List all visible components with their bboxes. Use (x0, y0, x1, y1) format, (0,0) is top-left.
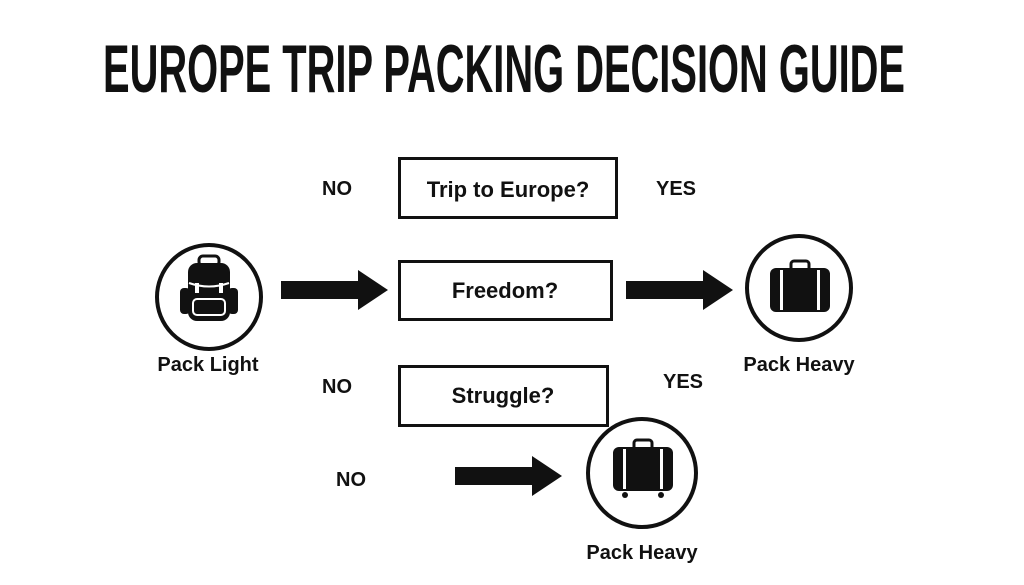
label: NO top: NO (322, 178, 352, 200)
label: NO middle: NO (322, 376, 352, 398)
arrow: bottom (455, 456, 562, 496)
arrow: left to Freedom (281, 270, 388, 310)
label: YES middle: YES (663, 371, 703, 393)
label: Pack Heavy right: Pack Heavy (743, 354, 855, 376)
box: Freedom?: Freedom? (452, 278, 558, 303)
label: NO bottom: NO (336, 469, 366, 491)
label: YES top: YES (656, 178, 696, 200)
box: Struggle?: Struggle? (452, 383, 554, 408)
arrow: Freedom to right (626, 270, 733, 310)
label: Pack Light: Pack Light (157, 354, 259, 376)
icon: suitcase circle right (747, 236, 851, 340)
icon: suitcase circle bottom (588, 419, 696, 527)
box: Struggle? (400, 366, 608, 426)
icon: backpack circle (157, 245, 261, 349)
box: Trip to Europe?: Trip to Europe? (427, 177, 589, 202)
box: Trip to Europe? (400, 158, 616, 218)
box: Freedom? (400, 262, 612, 320)
label: Pack Heavy bottom: Pack Heavy (586, 542, 698, 564)
